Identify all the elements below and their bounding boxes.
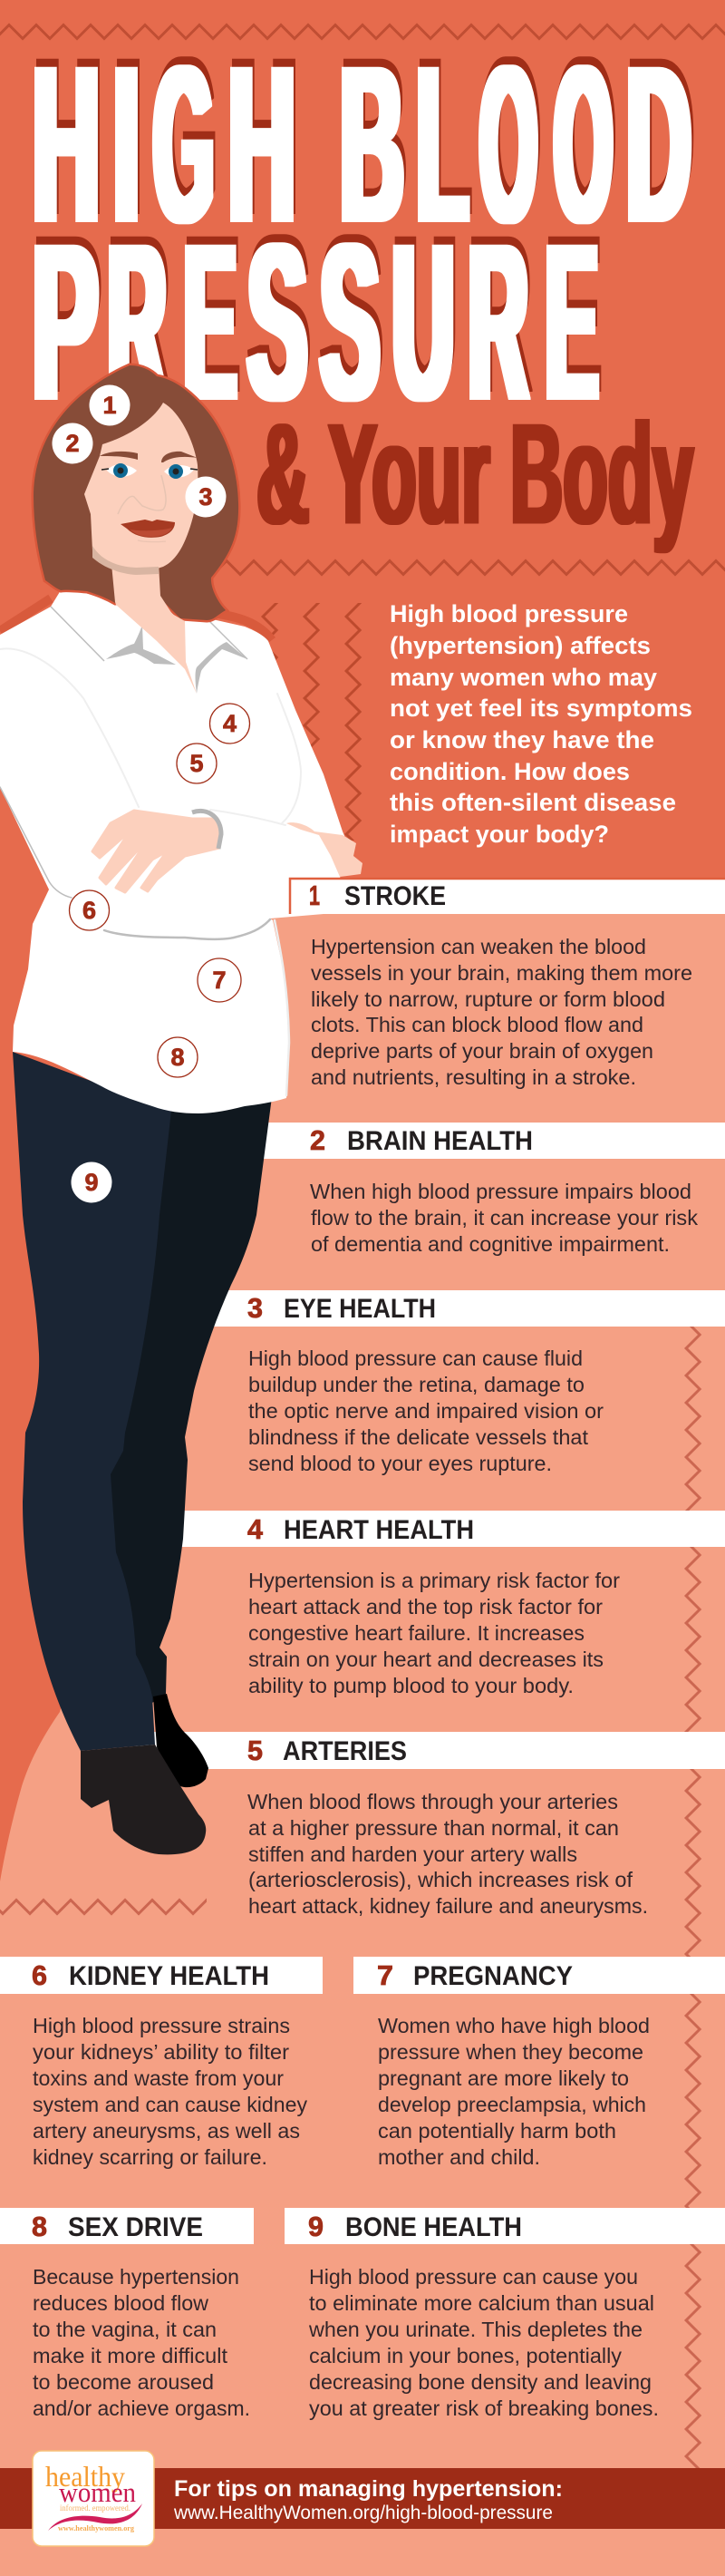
face [84, 403, 198, 572]
marker 5: 5 [189, 750, 204, 777]
section 6: kidney health: 6 [32, 1959, 47, 1991]
light content panel [0, 914, 725, 2576]
marker 3: 3 [198, 483, 213, 510]
title: High Blood Pressure: R [469, 198, 527, 447]
section 5: arteries: heart attack, kidney failure and aneurysms. [248, 1894, 648, 1918]
section 4: heart health: congestive heart failure. It increases [248, 1621, 585, 1645]
shoe: back [153, 1694, 208, 1787]
marker 6 [69, 890, 109, 930]
title: High Blood Pressure: S [247, 198, 307, 447]
logo: HealthyWomen: www.healthywomen.org [58, 2523, 135, 2532]
title: High Blood Pressure: B [341, 20, 403, 269]
section 9: bone health: 9 [308, 2211, 324, 2242]
top zigzag border [0, 21, 725, 43]
marker 8: 8 [170, 1044, 185, 1071]
nose line [118, 475, 166, 514]
logo: HealthyWomen: healthy [45, 2460, 125, 2493]
title: High Blood Pressure: L [417, 20, 468, 269]
section 9: bone health: you at greater risk of breaking bones. [309, 2396, 659, 2420]
intro paragraph: or know they have the [390, 726, 654, 753]
title: High Blood Pressure: P [34, 190, 100, 439]
title: High Blood Pressure: S [322, 190, 382, 439]
jeans: far leg [82, 1088, 272, 1705]
section 2: brain health: When high blood pressure impairs blood [310, 1180, 691, 1203]
section 6: kidney health: artery aneurysms, as well as [33, 2119, 300, 2143]
marker 2: 2 [65, 430, 80, 457]
section 1 body text: stroke: clots. This can block blood flow and [311, 1013, 643, 1036]
marker 3 [185, 477, 227, 517]
bar: stroke [289, 878, 725, 914]
section 8: sex drive: reduces blood flow [33, 2291, 208, 2315]
title: High Blood Pressure: S [249, 190, 309, 439]
title: High Blood Pressure: S [320, 198, 380, 447]
title: High Blood Pressure: I [113, 20, 140, 269]
section 8: sex drive: SEX DRIVE [68, 2212, 203, 2242]
section 5: arteries: at a higher pressure than normal, it can [248, 1816, 619, 1840]
section 9: bone health: calcium in your bones, potentially [309, 2344, 623, 2367]
bar: stroke: 1 [309, 880, 320, 911]
marker 5 [177, 744, 217, 783]
title: High Blood Pressure: B [343, 12, 405, 261]
section 9: bone health: to eliminate more calcium than usual [309, 2291, 654, 2315]
bottom-left zigzag [0, 1896, 207, 1918]
section 7: pregnancy [353, 1957, 725, 2169]
jeans: near leg [13, 1052, 171, 1751]
shirt [0, 590, 352, 1113]
section 6: kidney health: system and can cause kidney [33, 2093, 308, 2116]
section 8: sex drive: Because hypertension [33, 2265, 239, 2289]
section 5: arteries [136, 1732, 725, 1918]
title: High Blood Pressure: L [419, 12, 469, 261]
section 9: bone health: High blood pressure can cause you [309, 2265, 638, 2289]
hair halo and hair [34, 365, 238, 620]
section 3: eye health: the optic nerve and impaired vision or [248, 1399, 604, 1423]
eye right [164, 464, 198, 479]
title: High Blood Pressure: H [34, 12, 102, 261]
title: High Blood Pressure: E [547, 190, 600, 439]
title: High Blood Pressure: H [230, 12, 297, 261]
title: High Blood Pressure: O [556, 12, 614, 261]
section 6: kidney health: High blood pressure strains [33, 2014, 290, 2037]
bar: brain health [227, 1123, 725, 1159]
section 6: kidney health [0, 1957, 323, 2169]
intro paragraph: condition. How does [390, 758, 630, 785]
section 9: bone health: BONE HEALTH [345, 2212, 522, 2242]
marker 7: 7 [212, 967, 227, 994]
shoe: front [81, 1745, 206, 1854]
section 8: sex drive: to become aroused [33, 2370, 214, 2394]
section 1 body text: stroke [311, 935, 692, 1089]
bar: sex drive [0, 2208, 254, 2244]
title: High Blood Pressure: U [394, 190, 456, 439]
bar: bone health [285, 2208, 725, 2244]
collar right line [208, 620, 247, 659]
title: High Blood Pressure: O [480, 20, 536, 269]
jaw shadow [92, 546, 159, 575]
marker 2 [53, 423, 92, 464]
bar: arteries [136, 1732, 725, 1769]
section 3: eye health: EYE HEALTH [284, 1294, 436, 1324]
section 7: pregnancy: mother and child. [378, 2145, 540, 2169]
section 2: brain health: of dementia and cognitive impairment. [311, 1232, 670, 1256]
title: High Blood Pressure: I [115, 12, 141, 261]
section 7: pregnancy: 7 [377, 1959, 393, 1991]
eye left [102, 463, 137, 478]
section 4: heart health [136, 1511, 725, 1697]
marker 9: 9 [84, 1169, 99, 1196]
marker 8 [158, 1037, 198, 1077]
chin line [138, 540, 166, 542]
section 9: bone health: decreasing bone density and leaving [309, 2370, 652, 2394]
section 3: eye health [136, 1290, 725, 1475]
section 2: brain health [227, 1123, 725, 1256]
eyebrow right [161, 452, 198, 462]
title: High Blood Pressure: E [546, 198, 598, 447]
section 8: sex drive [0, 2208, 254, 2420]
section 9: bone health [285, 2208, 725, 2420]
marker 1 [89, 384, 130, 426]
title: High Blood Pressure: P [33, 198, 98, 447]
lips [121, 520, 175, 538]
section 5: arteries: 5 [247, 1735, 263, 1766]
upper hand [92, 811, 219, 892]
section 2: brain health: 2 [310, 1124, 325, 1156]
title: High Blood Pressure: R [108, 198, 166, 447]
section 5: arteries: ARTERIES [283, 1736, 407, 1766]
footer band [0, 2468, 725, 2529]
section 7: pregnancy: develop preeclampsia, which [378, 2093, 646, 2116]
logo: HealthyWomen: informed. empowered. [60, 2503, 130, 2513]
section 7: pregnancy: pregnant are more likely to [378, 2066, 629, 2090]
shirt fold lines [0, 648, 301, 1095]
collar left line [51, 607, 104, 661]
bar: pregnancy [353, 1957, 725, 1994]
section 6: kidney health: toxins and waste from your [33, 2066, 284, 2090]
section 8: sex drive: 8 [32, 2211, 47, 2242]
logo: HealthyWomen [33, 2451, 154, 2546]
section 5: arteries: (arteriosclerosis), which increases risk of [248, 1868, 633, 1891]
middle zigzag border [218, 557, 725, 578]
marker 9 [71, 1162, 112, 1202]
marker 6: 6 [82, 897, 96, 924]
title: High Blood Pressure: G [155, 12, 216, 261]
intro paragraph: this often-silent disease [390, 789, 676, 816]
section 3: eye health: buildup under the retina, damage to [248, 1373, 585, 1396]
section 6: kidney health: kidney scarring or failure. [33, 2145, 267, 2169]
section 3: eye health: blindness if the delicate vessels that [248, 1425, 589, 1449]
footer band: For tips on managing hypertension: [174, 2476, 563, 2502]
section 7: pregnancy: PREGNANCY [413, 1961, 573, 1991]
collar shadow left [106, 625, 176, 665]
marker 4: 4 [223, 710, 237, 737]
marker 1: 1 [102, 392, 117, 419]
section 1 body text: stroke: likely to narrow, rupture or form blood [311, 987, 665, 1011]
section 3: eye health: High blood pressure can cause fluid [248, 1346, 583, 1370]
intro zigzag decoration [259, 603, 364, 841]
title: High Blood Pressure: O [555, 20, 613, 269]
bar: stroke: STROKE [344, 881, 446, 911]
section 6: kidney health: your kidneys’ ability to filter [33, 2040, 289, 2064]
section 1 body text: stroke: and nutrients, resulting in a stroke. [311, 1065, 636, 1089]
intro paragraph: many women who may [390, 664, 657, 691]
section 5: arteries: When blood flows through your arteries [247, 1790, 618, 1813]
eyebrow left [100, 452, 138, 460]
marker 7 [198, 958, 241, 1002]
bar: heart health [136, 1511, 725, 1547]
panel zigzags on right edge [682, 1327, 704, 2468]
logo: HealthyWomen: women [59, 2476, 136, 2508]
cuff [192, 811, 221, 849]
marker 4 [210, 704, 250, 744]
section 8: sex drive: and/or achieve orgasm. [33, 2396, 250, 2420]
section 4: heart health: ability to pump blood to your body. [248, 1674, 574, 1697]
bar: kidney health [0, 1957, 323, 1994]
neck and chest [111, 564, 197, 694]
section 4: heart health: strain on your heart and decreases its [248, 1648, 604, 1671]
section 4: heart health: Hypertension is a primary risk factor for [248, 1569, 620, 1592]
title: High Blood Pressure: H [228, 20, 295, 269]
title: High Blood Pressure: O [482, 12, 538, 261]
section 2: brain health: flow to the brain, it can increase your risk [311, 1206, 699, 1230]
section 4: heart health: heart attack and the top risk factor for [248, 1595, 603, 1619]
title: High Blood Pressure: R [110, 190, 168, 439]
title: High Blood Pressure: G [153, 20, 214, 269]
footer band: www.HealthyWomen.org/high-blood-pressure [173, 2503, 553, 2523]
section 1 body text: stroke: Hypertension can weaken the blood [311, 935, 646, 958]
bar: eye health [136, 1290, 725, 1327]
title: High Blood Pressure: R [470, 190, 529, 439]
intro paragraph: (hypertension) affects [390, 632, 651, 659]
section 5: arteries: stiffen and harden your artery walls [248, 1842, 577, 1866]
section 9: bone health: when you urinate. This depletes the [308, 2318, 643, 2341]
lower lip [130, 528, 172, 537]
lower hand [286, 822, 362, 877]
section 8: sex drive: to the vagina, it can [33, 2318, 217, 2341]
section 7: pregnancy: Women who have high blood [378, 2014, 650, 2037]
intro paragraph: impact your body? [390, 821, 609, 848]
figure: woman illustration [0, 365, 362, 1854]
collar shadow right [196, 642, 247, 694]
title: High Blood Pressure: E [184, 198, 237, 447]
intro paragraph: High blood pressure [390, 600, 628, 627]
section 1 body text: stroke: vessels in your brain, making them more [311, 961, 692, 985]
section 7: pregnancy: pressure when they become [378, 2040, 643, 2064]
section 7: pregnancy: can potentially harm both [378, 2119, 616, 2143]
section 3: eye health: 3 [247, 1292, 263, 1324]
title: High Blood Pressure: U [392, 198, 454, 447]
section 2: brain health: BRAIN HEALTH [347, 1126, 533, 1156]
section 1 body text: stroke: deprive parts of your brain of oxygen [311, 1039, 653, 1063]
title: High Blood Pressure: H [33, 20, 100, 269]
section 6: kidney health: KIDNEY HEALTH [69, 1961, 269, 1991]
section 8: sex drive: make it more difficult [33, 2344, 228, 2367]
section 4: heart health: 4 [247, 1513, 264, 1545]
title: High Blood Pressure [33, 12, 692, 447]
section 3: eye health: send blood to your eyes rupture. [248, 1452, 552, 1475]
title: High Blood Pressure: E [186, 190, 238, 439]
intro paragraph [390, 600, 692, 848]
section 4: heart health: HEART HEALTH [284, 1515, 474, 1545]
shoulder halo [0, 598, 272, 640]
intro paragraph: not yet feel its symptoms [390, 695, 692, 722]
